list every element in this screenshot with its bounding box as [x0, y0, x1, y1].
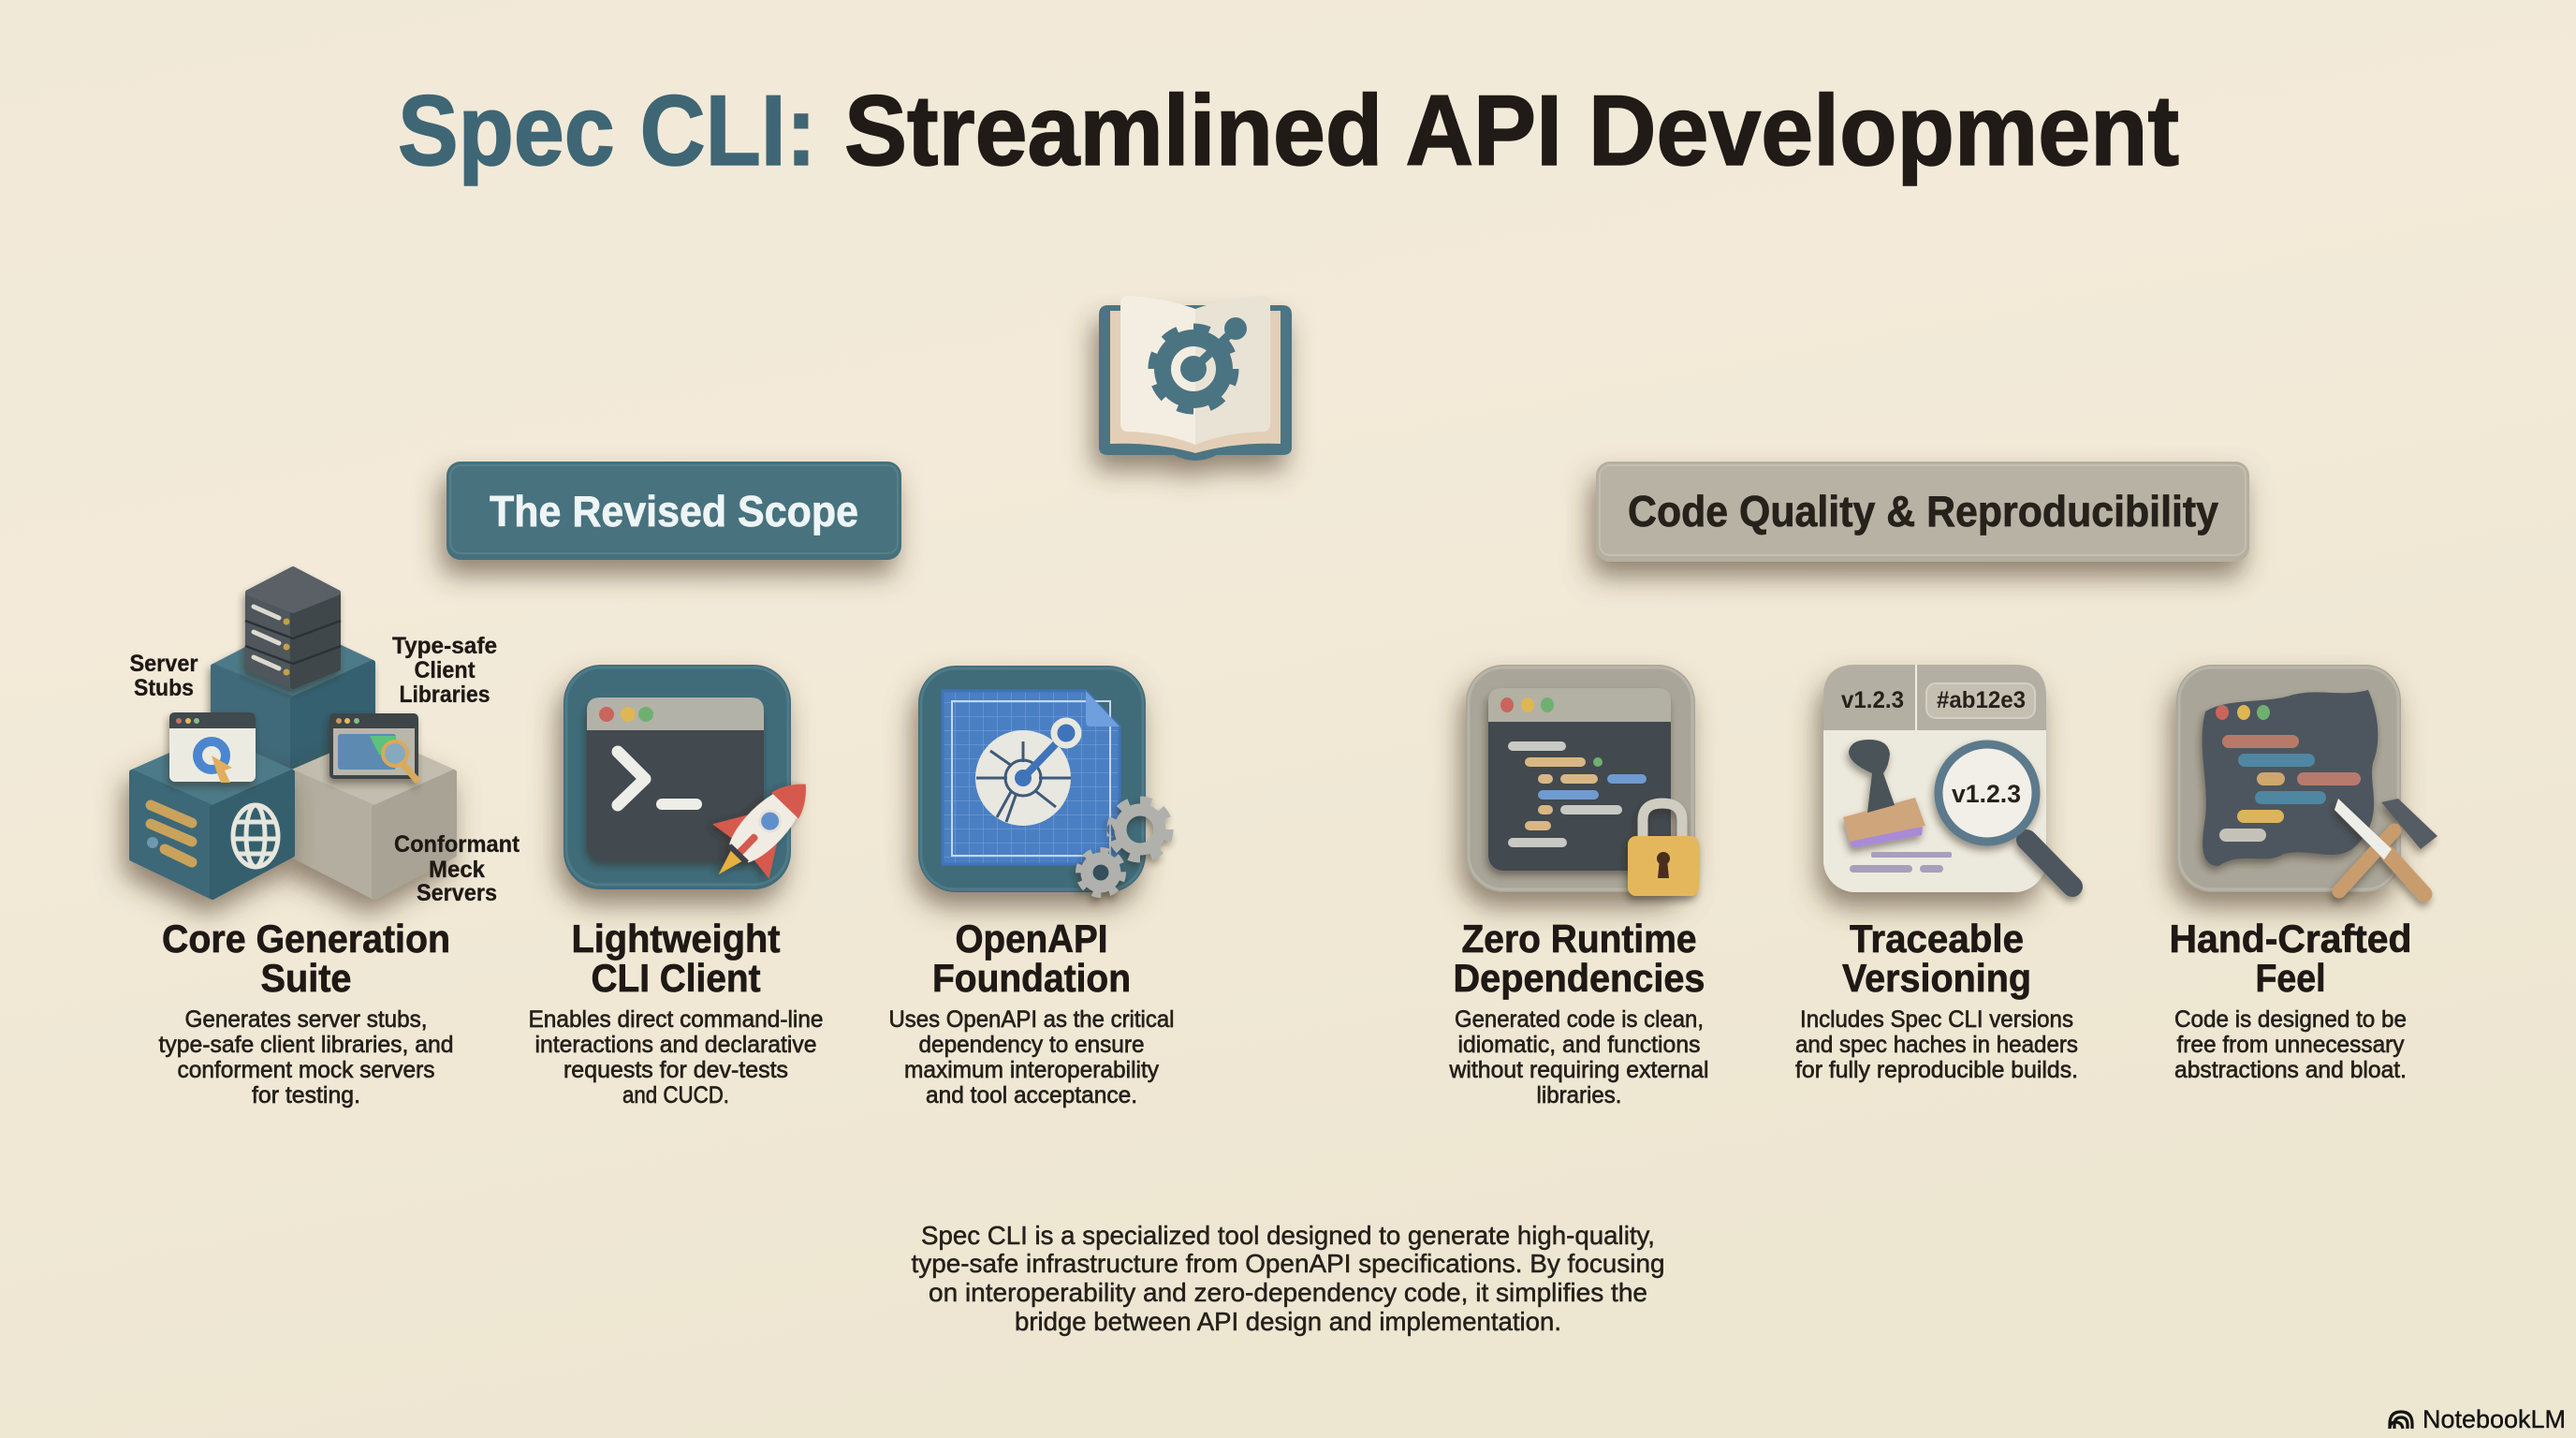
text block: Hand-Crafted Feel: Hand-Crafted: [2170, 917, 2411, 961]
text block: OpenAPI Foundation: [889, 917, 1174, 1108]
orange bars on cube: [151, 805, 192, 862]
small window: client libraries: [329, 713, 418, 780]
icon: core generation cubes: [132, 569, 454, 897]
text block: Zero Runtime Dependencies: [1449, 917, 1709, 1108]
text block: Lightweight CLI Client: Lightweight: [571, 917, 781, 961]
text block: Traceable Versioning: Includes Spec CLI versions: [1800, 1006, 2073, 1033]
grey cube: [292, 737, 454, 897]
text block: Hand-Crafted Feel: abstractions and bloat.: [2174, 1057, 2407, 1083]
label: Server Stubs: [129, 651, 198, 701]
label: Conformant Meck Servers: [394, 831, 520, 906]
text block: Zero Runtime Dependencies: Zero Runtime: [1462, 917, 1696, 961]
text block: Lightweight CLI Client: [528, 917, 824, 1108]
text block: Core Generation Suite: Core Generation: [162, 917, 450, 961]
text block: Lightweight CLI Client: interactions and declarative: [535, 1032, 816, 1058]
label: Type-safe Client Libraries: Type-safe: [392, 633, 497, 659]
label: Type-safe Client Libraries: Client: [414, 657, 476, 683]
globe on cube: [233, 805, 278, 867]
label: Type-safe Client Libraries: [392, 633, 497, 708]
text block: summary paragraph: bridge between API design and implementation.: [1015, 1307, 1561, 1336]
label: Conformant Meck Servers: Meck: [429, 857, 485, 883]
icon: code window with padlock: [1466, 665, 1699, 896]
panel heading: Code Quality and Reproducibility: [1596, 462, 2249, 562]
text block: Lightweight CLI Client: Enables direct command-line: [528, 1006, 824, 1033]
text block: Zero Runtime Dependencies: idiomatic, and functions: [1458, 1032, 1700, 1058]
icon: OpenAPI blueprint: [918, 666, 1166, 892]
text block: Zero Runtime Dependencies: Generated code is clean,: [1455, 1006, 1704, 1033]
text block: summary paragraph: Spec CLI is a specialized tool designed to generate high-quality,: [921, 1221, 1655, 1250]
text block: Lightweight CLI Client: and CUCD.: [622, 1082, 729, 1108]
text block: OpenAPI Foundation: Uses OpenAPI as the critical: [889, 1006, 1174, 1033]
text block: Traceable Versioning: Traceable: [1850, 917, 2024, 961]
text block: Hand-Crafted Feel: Code is designed to be: [2174, 1006, 2407, 1033]
text block: Core Generation Suite: Suite: [260, 956, 352, 1000]
icon: terminal with rocket: [564, 665, 834, 902]
panel heading: Code Quality and Reproducibility: Code Quality & Reproducibility: [1628, 487, 2218, 536]
text block: Traceable Versioning: [1795, 917, 2078, 1083]
icon: open book with gear: [1099, 296, 1292, 461]
title: Streamlined API Development: [844, 74, 2179, 186]
text block: OpenAPI Foundation: Foundation: [932, 956, 1131, 1000]
text block: summary paragraph: [912, 1221, 1664, 1336]
text block: Core Generation Suite: [159, 917, 453, 1108]
logo: NotebookLM: NotebookLM: [2422, 1405, 2566, 1433]
text block: Core Generation Suite: for testing.: [252, 1082, 360, 1108]
text block: Hand-Crafted Feel: Feel: [2256, 956, 2325, 1000]
text block: OpenAPI Foundation: OpenAPI: [955, 917, 1108, 961]
icon: versioning stamp and magnifier: v1.2.3: [1841, 687, 1904, 713]
text block: OpenAPI Foundation: maximum interoperability: [904, 1057, 1159, 1083]
text block: summary paragraph: type-safe infrastructure from OpenAPI specifications. By focusing: [912, 1249, 1664, 1278]
text block: Core Generation Suite: Generates server stubs,: [185, 1006, 427, 1033]
magnifier: [1939, 744, 2072, 887]
icon: versioning stamp and magnifier: #ab12e3: [1937, 687, 2026, 713]
icon: versioning stamp and magnifier: [1823, 665, 2072, 892]
server stack: [245, 569, 341, 686]
lower teal cube: [132, 737, 292, 897]
text block: Traceable Versioning: and spec haches in headers: [1795, 1032, 2078, 1058]
small window: server stubs: [169, 712, 256, 783]
label: Conformant Meck Servers: Conformant: [394, 831, 520, 858]
icon: versioning stamp and magnifier: v1.2.3: [1952, 780, 2021, 808]
icon: hand-crafted code with tools: [2176, 665, 2437, 894]
text block: OpenAPI Foundation: dependency to ensure: [919, 1032, 1144, 1058]
text block: Hand-Crafted Feel: [2170, 917, 2411, 1083]
title: Spec CLI:: [398, 74, 816, 186]
label: Server Stubs: Server: [129, 651, 198, 677]
text block: Zero Runtime Dependencies: without requiring external: [1449, 1057, 1709, 1083]
label: Conformant Meck Servers: Servers: [417, 880, 497, 906]
text block: OpenAPI Foundation: and tool acceptance.: [926, 1082, 1137, 1108]
text block: Hand-Crafted Feel: free from unnecessary: [2177, 1032, 2405, 1058]
stamp: [1843, 740, 1925, 848]
upper teal cube: [213, 625, 373, 770]
text block: Lightweight CLI Client: requests for dev-tests: [564, 1057, 788, 1083]
text block: Traceable Versioning: Versioning: [1842, 956, 2031, 1000]
text block: Zero Runtime Dependencies: Dependencies: [1453, 956, 1705, 1000]
label: Type-safe Client Libraries: Libraries: [399, 682, 490, 708]
panel heading: The Revised Scope: The Revised Scope: [490, 487, 858, 536]
text block: Zero Runtime Dependencies: libraries.: [1537, 1082, 1621, 1108]
text block: Core Generation Suite: type-safe client libraries, and: [159, 1032, 453, 1058]
text block: Traceable Versioning: for fully reproducible builds.: [1795, 1057, 2078, 1083]
text block: Lightweight CLI Client: CLI Client: [592, 956, 761, 1000]
panel heading: The Revised Scope: [446, 462, 901, 560]
label: Server Stubs: Stubs: [134, 675, 194, 701]
text block: Core Generation Suite: conforment mock servers: [178, 1057, 434, 1083]
text block: summary paragraph: on interoperability and zero-dependency code, it simplifies the: [929, 1278, 1647, 1307]
